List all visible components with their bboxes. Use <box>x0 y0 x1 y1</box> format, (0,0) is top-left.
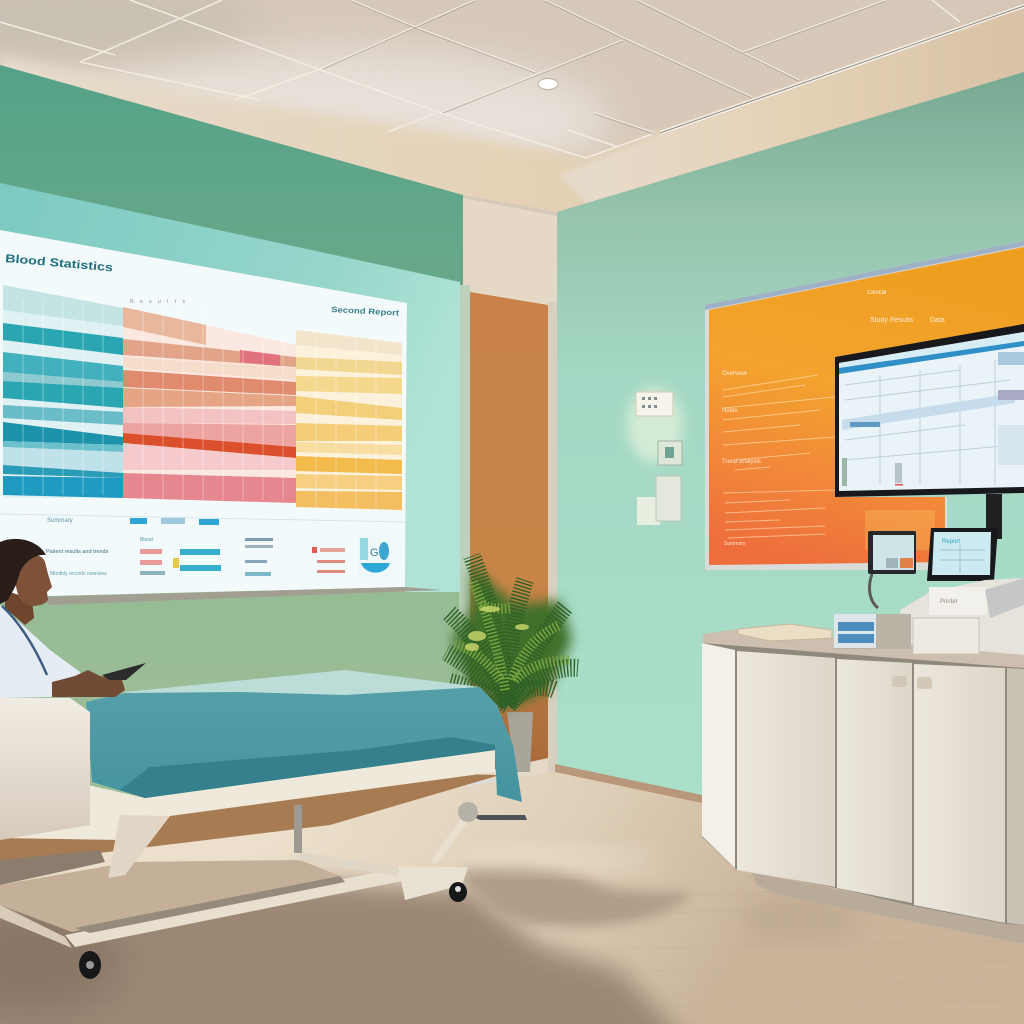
board text block <box>722 317 945 547</box>
plant <box>446 556 578 772</box>
yellow column <box>296 330 402 510</box>
left wall <box>0 65 463 865</box>
window sill <box>40 587 442 605</box>
panel text: Patient results and trends <box>46 549 109 555</box>
printer <box>900 578 1024 655</box>
cabinet base <box>752 873 1024 944</box>
heat map chart <box>3 285 402 510</box>
display recess <box>0 183 460 592</box>
board text block: Trend analysis <box>722 459 761 465</box>
fern highlights <box>465 606 529 651</box>
thermostat <box>636 392 673 416</box>
mattress head <box>0 698 90 840</box>
floor <box>0 772 1024 1024</box>
paper box <box>913 618 979 654</box>
circular infographic icon: G <box>370 547 379 559</box>
fern fronds dark <box>446 556 578 705</box>
ceiling light <box>538 78 558 90</box>
lower dashboard panels <box>0 514 405 577</box>
cabinet <box>702 643 1024 944</box>
wheel <box>449 882 467 902</box>
right wall <box>557 72 1024 940</box>
air vent strip <box>660 6 1024 133</box>
panel heading: Summary <box>47 518 73 524</box>
arm and hands <box>52 670 125 697</box>
orange information board <box>705 241 1024 570</box>
door bay <box>459 198 557 780</box>
bed base frame <box>0 802 527 948</box>
counter top <box>703 629 1024 669</box>
teal blanket <box>86 687 522 802</box>
monitor arm <box>986 494 1002 539</box>
board heading: Clinical <box>867 290 886 296</box>
plant pot <box>507 712 533 772</box>
hospital bed <box>0 670 527 979</box>
tablet display small <box>868 531 916 608</box>
column backgrounds <box>3 285 402 510</box>
wall outlet plates <box>637 497 660 525</box>
circular infographic icon <box>358 535 391 577</box>
board text block: Summary <box>724 541 746 547</box>
bed side rail <box>0 750 495 840</box>
wall control panels <box>627 387 683 525</box>
neck <box>5 590 34 625</box>
bed sheet <box>125 670 480 702</box>
stacked papers <box>738 624 832 641</box>
supply box with blue labels <box>834 614 911 649</box>
wood strip behind bed <box>0 774 500 865</box>
face <box>15 555 52 606</box>
wall baseboard <box>555 764 702 806</box>
board text block: Study Results <box>870 317 914 324</box>
panel text: Monthly records overview <box>50 571 107 577</box>
tablet display large <box>927 528 998 581</box>
monitor dashboard content <box>842 352 1024 486</box>
red column <box>123 307 296 503</box>
printer: Printer <box>940 599 958 605</box>
tablet device <box>102 663 146 680</box>
small display labels: Results <box>130 299 186 305</box>
glowing statistics wall display <box>0 230 407 597</box>
ceiling <box>0 0 1024 230</box>
nurse <box>0 539 146 698</box>
board text block: Overview <box>722 371 748 377</box>
secondary heading: Second Report <box>331 305 400 318</box>
teal column <box>3 285 123 498</box>
board text block: Data <box>930 317 945 324</box>
tablet display large: Report <box>942 539 960 545</box>
white coat <box>0 605 82 698</box>
wall monitor <box>835 324 1024 539</box>
fern fronds light <box>455 580 570 690</box>
stethoscope <box>2 606 47 675</box>
panel text: Blood <box>140 537 153 543</box>
display title: Blood Statistics <box>5 253 113 274</box>
board text block: Notes <box>722 408 738 414</box>
hair <box>0 539 46 604</box>
wall switch <box>658 441 682 465</box>
cabinet handles <box>892 676 907 687</box>
wheel <box>79 951 101 979</box>
